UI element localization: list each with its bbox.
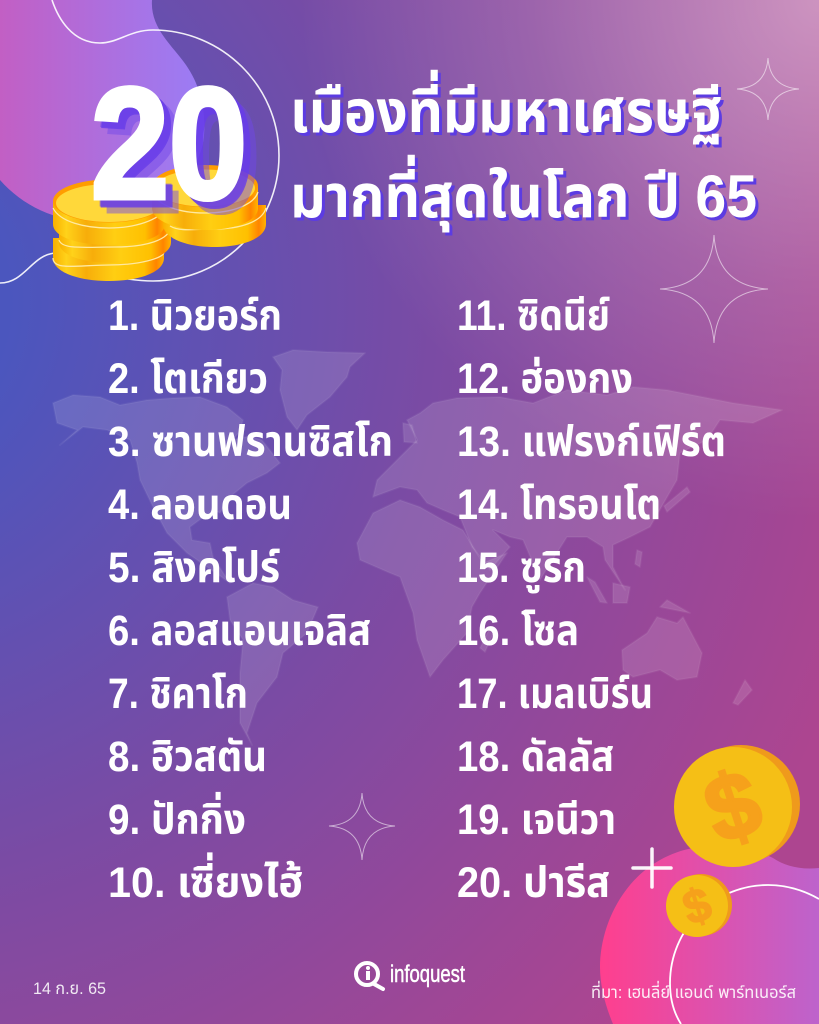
logo: infoquest: infoquest xyxy=(390,961,465,988)
list: ranks 11 to 20: 11. ซิดนีย์ xyxy=(457,292,610,340)
blob: bottom right xyxy=(600,846,819,1024)
list: ranks 1 to 10: 7. ชิคาโก xyxy=(108,670,248,718)
line decoration: bottom right circle xyxy=(670,885,819,1024)
list: ranks 1 to 10 xyxy=(108,292,393,907)
list: ranks 1 to 10: 4. ลอนดอน xyxy=(108,481,292,529)
list: ranks 1 to 10: 1. นิวยอร์ก xyxy=(108,292,282,340)
date: 14 ก.ย. 65 xyxy=(33,979,106,998)
icon: plus xyxy=(633,849,671,887)
list: ranks 11 to 20: 12. ฮ่องกง xyxy=(457,355,633,403)
sparkles xyxy=(329,58,799,860)
list: ranks 11 to 20: 15. ซูริก xyxy=(457,544,586,593)
icon: magnifier xyxy=(356,963,383,989)
list: ranks 11 to 20: 16. โซล xyxy=(457,607,579,655)
icon: large dollar coin xyxy=(674,745,800,867)
list: ranks 1 to 10: 10. เซี่ยงไฮ้ xyxy=(108,852,303,907)
logo: infoquest xyxy=(356,961,465,989)
list: ranks 11 to 20: 17. เมลเบิร์น xyxy=(457,670,653,718)
list: ranks 1 to 10: 2. โตเกียว xyxy=(108,355,268,403)
icon: small dollar coin xyxy=(666,874,732,937)
line decoration: top left circle and waves xyxy=(0,0,279,283)
source: ที่มา: เฮนลี่ย์ แอนด์ พาร์ทเนอร์ส xyxy=(591,980,796,1002)
list: ranks 11 to 20: 19. เจนีวา xyxy=(457,796,616,844)
blob: top left xyxy=(0,0,204,222)
right stack xyxy=(152,165,266,247)
list: ranks 11 to 20: 13. แฟรงก์เฟิร์ต xyxy=(457,418,726,466)
list: ranks 1 to 10: 9. ปักกิ่ง xyxy=(108,792,246,844)
list: ranks 11 to 20: 14. โทรอนโต xyxy=(457,481,661,529)
list: ranks 1 to 10: 8. ฮิวสตัน xyxy=(108,733,267,781)
list: ranks 1 to 10: 5. สิงคโปร์ xyxy=(108,544,280,592)
world map xyxy=(53,350,782,745)
icon: large dollar coin: $ xyxy=(693,751,773,863)
list: ranks 1 to 10: 6. ลอสแอนเจลิส xyxy=(108,607,371,655)
title: เมืองที่มีมหาเศรษฐี xyxy=(290,69,722,145)
left stack xyxy=(53,180,171,281)
title xyxy=(290,69,757,233)
list: ranks 1 to 10: 3. ซานฟรานซิสโก xyxy=(108,418,393,466)
icon: coin stacks xyxy=(53,165,266,281)
list: ranks 11 to 20: 18. ดัลลัส xyxy=(457,733,614,781)
big number 20: 20 xyxy=(91,56,247,232)
list: ranks 11 to 20 xyxy=(457,292,726,907)
icon: small dollar coin: $ xyxy=(676,876,717,935)
list: ranks 11 to 20: 20. ปารีส xyxy=(457,859,610,907)
title: มากที่สุดในโลก ปี 65 xyxy=(290,154,757,233)
